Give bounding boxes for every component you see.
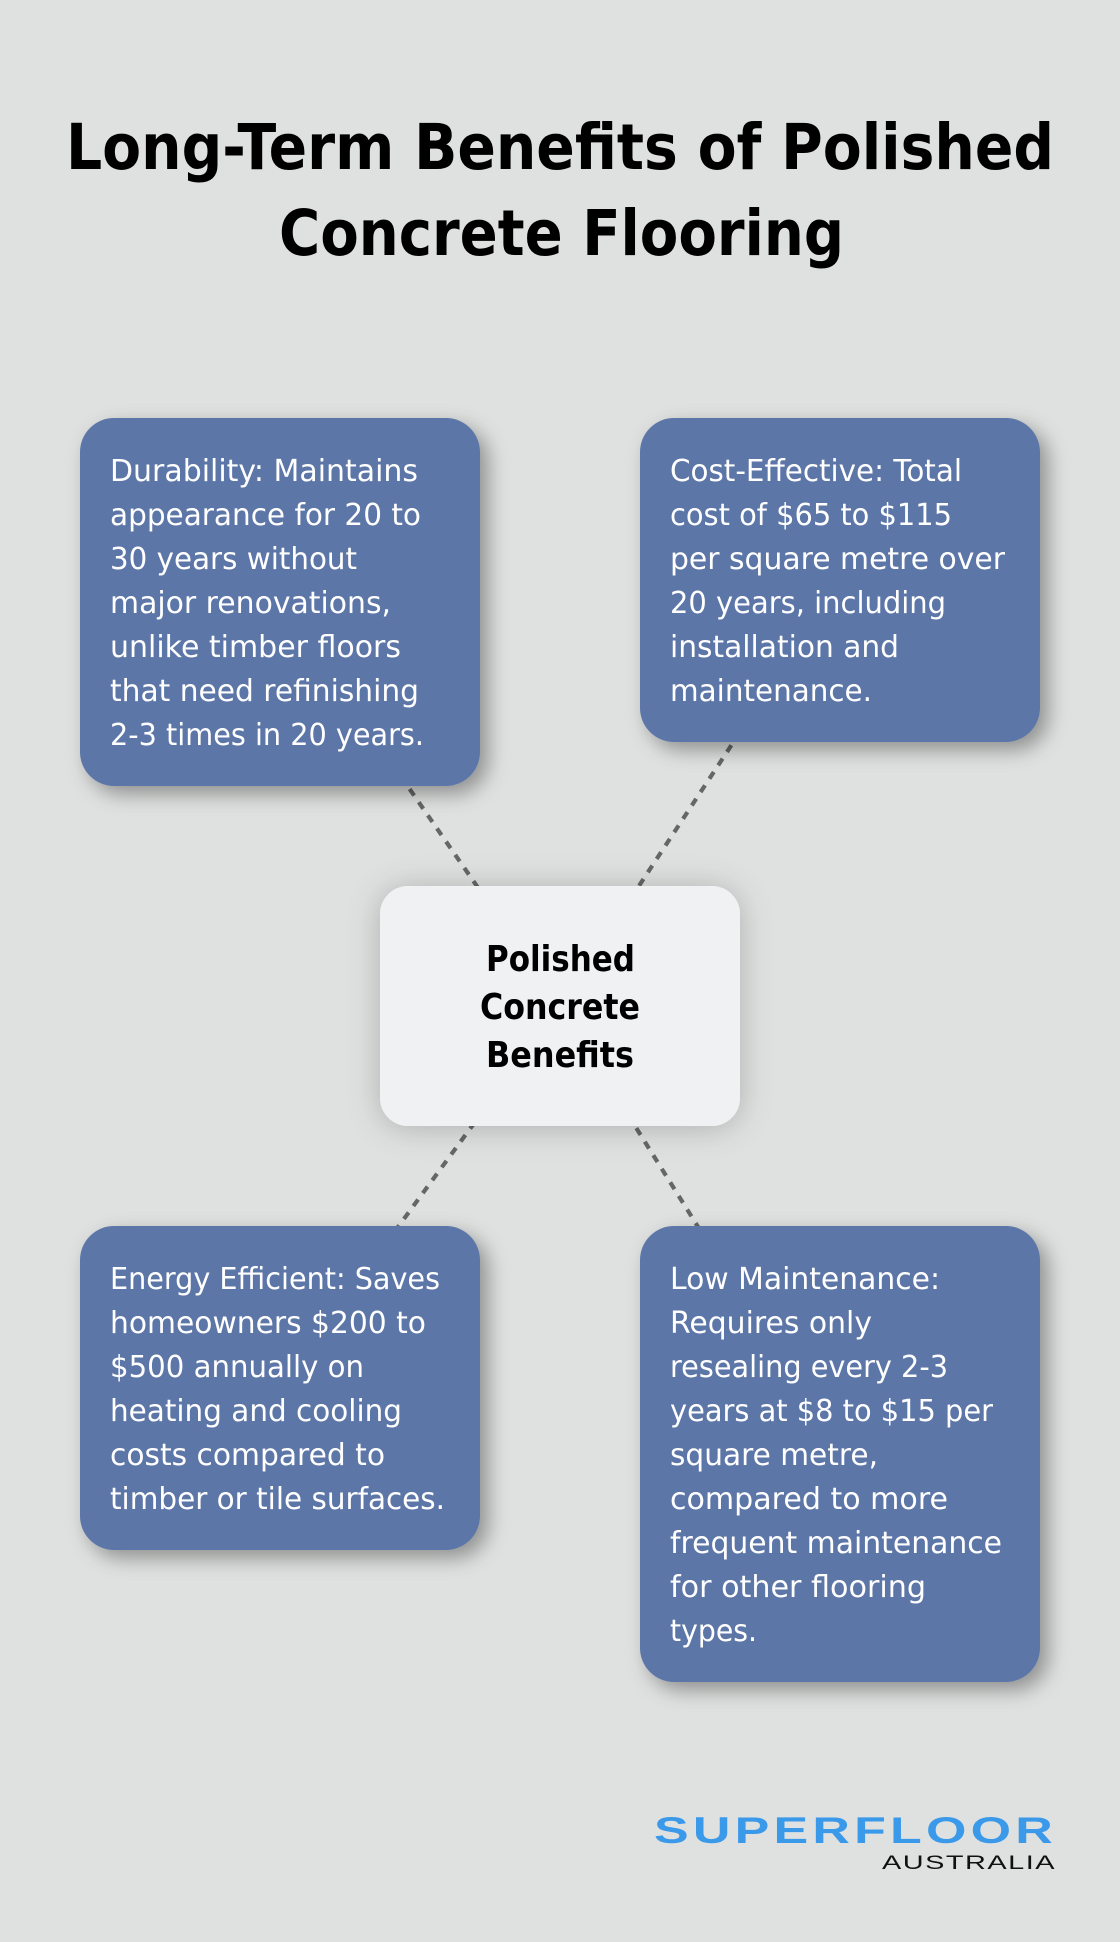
panel: centre node: Polished [486, 939, 635, 980]
panel: cost-effective: installation and [670, 630, 899, 665]
panel: cost-effective: maintenance. [670, 674, 872, 709]
title [66, 111, 1054, 270]
logo: Superfloor Australia: SUPERFLOOR [654, 1810, 1057, 1851]
panel: cost-effective: Cost-Effective: Total [670, 454, 962, 489]
panel: cost-effective: per square metre over [670, 542, 1005, 577]
panel: durability: major renovations, [110, 586, 391, 621]
panel: low maintenance: Requires only [670, 1306, 872, 1341]
panel: centre node: Concrete [480, 987, 640, 1028]
panel: cost-effective [640, 418, 1040, 742]
panel: low maintenance: resealing every 2-3 [670, 1350, 948, 1385]
panel: low maintenance: types. [670, 1614, 757, 1649]
panel: energy efficient: $500 annually on [110, 1350, 364, 1385]
panel: low maintenance: for other flooring [670, 1570, 926, 1605]
title: Concrete Flooring [279, 197, 844, 270]
panel: energy efficient [80, 1226, 480, 1550]
panel: centre node: Benefits [486, 1035, 634, 1076]
panel: durability: 30 years without [110, 542, 357, 577]
panel: low maintenance: frequent maintenance [670, 1526, 1002, 1561]
panel: durability: unlike timber floors [110, 630, 401, 665]
panel: energy efficient: Energy Efficient: Saves [110, 1262, 440, 1297]
panel: energy efficient: costs compared to [110, 1438, 385, 1473]
panel: cost-effective: cost of $65 to $115 [670, 498, 952, 533]
connectors: dashed lines from centre to cards [280, 580, 840, 1454]
panel: durability: 2-3 times in 20 years. [110, 718, 424, 753]
panel: low maintenance [640, 1226, 1040, 1682]
panel: cost-effective: 20 years, including [670, 586, 946, 621]
panel: low maintenance: compared to more [670, 1482, 948, 1517]
panel: low maintenance: years at $8 to $15 per [670, 1394, 993, 1429]
logo: Superfloor Australia [654, 1810, 1057, 1874]
panel: durability: Durability: Maintains [110, 454, 418, 489]
panel: low maintenance: Low Maintenance: [670, 1262, 940, 1297]
panel: durability: appearance for 20 to [110, 498, 421, 533]
panel: low maintenance: square metre, [670, 1438, 878, 1473]
panel: durability: that need refinishing [110, 674, 419, 709]
logo: Superfloor Australia: AUSTRALIA [882, 1852, 1056, 1874]
panel: centre node [380, 886, 740, 1126]
panel: energy efficient: heating and cooling [110, 1394, 402, 1429]
panel: energy efficient: timber or tile surfaces. [110, 1482, 445, 1517]
panel: energy efficient: homeowners $200 to [110, 1306, 426, 1341]
panel: durability [80, 418, 480, 786]
